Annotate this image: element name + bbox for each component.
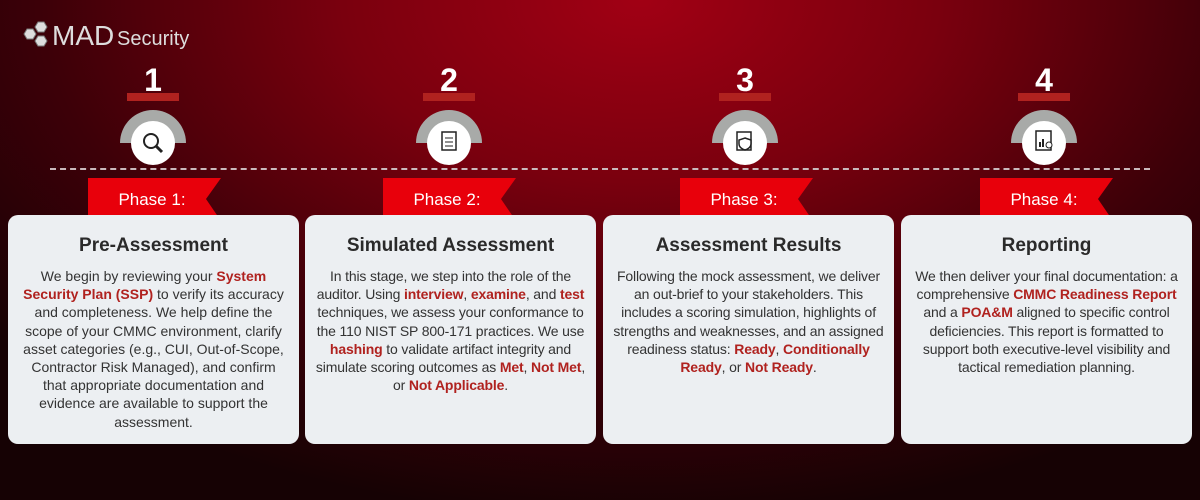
step 1 number: 1	[144, 62, 162, 98]
step 4 number: 4	[1035, 62, 1053, 98]
ribbon phase 1: Phase 1:	[118, 190, 186, 209]
icon: report gauge	[1011, 110, 1077, 165]
ribbon phase 3	[680, 178, 813, 215]
ribbon phase 4	[980, 178, 1113, 215]
ribbon phase 2: Phase 2:	[413, 190, 481, 209]
dashed line	[50, 168, 1150, 170]
panel: assessment results: Following the mock assessment, we deliver an out-brief to your stakeholders. This includes a scoring simulation, highlights of strengths and weaknesses, and an assigned readiness status: Ready, Conditionally Ready, or Not Ready.	[613, 268, 884, 375]
ribbon phase 3: Phase 3:	[710, 190, 778, 209]
panel: simulated assessment	[305, 215, 596, 444]
icon: magnifier gauge	[120, 110, 186, 165]
icon: clipboard gauge	[416, 110, 482, 165]
panel: assessment results	[603, 215, 894, 444]
logo: Security	[117, 28, 189, 50]
icon: shield doc gauge	[712, 110, 778, 165]
ribbon phase 1	[88, 178, 221, 215]
panel: pre-assessment	[8, 215, 299, 444]
ribbon phase 4: Phase 4:	[1010, 190, 1078, 209]
panel: simulated assessment: In this stage, we step into the role of the auditor. Using interview, examine, and test techniques, we assess your conformance to the 110 NIST SP 800-171 practices. We use hashing to validate artifact integrity and simulate scoring outcomes as Met, Not Met, or Not Applicable.	[316, 268, 585, 393]
panel: reporting: Reporting	[1002, 235, 1091, 256]
panel: pre-assessment: Pre-Assessment	[79, 235, 228, 256]
step 2 number: 2	[440, 62, 458, 98]
panel: reporting	[901, 215, 1192, 444]
panel: pre-assessment: We begin by reviewing your System Security Plan (SSP) to verify its accuracy and completeness. We help define the scope of your CMMC environment, clarify asset categories (e.g., CUI, Out-of-Scope, Contractor Risk Managed), and confirm that appropriate documentation and evidence are available to support the assessment.	[23, 268, 284, 430]
step 3 number: 3	[736, 62, 754, 98]
panel: assessment results: Assessment Results	[656, 235, 841, 256]
ribbon phase 2	[383, 178, 516, 215]
logo	[24, 20, 190, 50]
panel: reporting: We then deliver your final documentation: a comprehensive CMMC Readiness Report and a POA&M aligned to specific control deficiencies. This report is formatted to support both executive-level visibility and tactical remediation planning.	[915, 268, 1178, 375]
panel: simulated assessment: Simulated Assessment	[347, 235, 554, 256]
